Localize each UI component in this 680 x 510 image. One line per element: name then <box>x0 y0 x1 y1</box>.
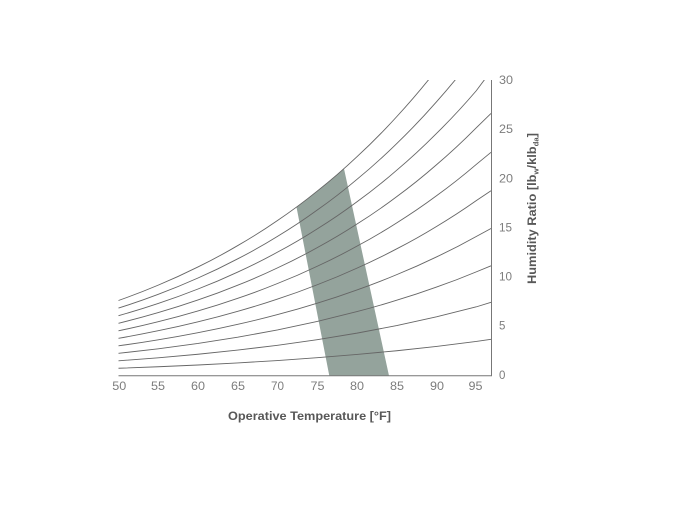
curve: 30% relative humidity <box>118 266 491 353</box>
x axis tick labels: 55 <box>151 381 165 393</box>
y axis tick labels: 20 <box>499 174 513 186</box>
y axis tick labels: 25 <box>499 124 513 136</box>
curve: 60% relative humidity <box>118 152 491 331</box>
y axis tick labels: 15 <box>499 222 512 234</box>
x axis tick labels: 85 <box>390 381 404 393</box>
curve: 80% relative humidity <box>118 71 491 316</box>
y axis tick labels <box>499 75 513 382</box>
curve: 90% relative humidity <box>118 80 456 308</box>
curve: 40% relative humidity <box>118 228 491 346</box>
x axis tick labels: 95 <box>468 381 482 393</box>
y axis title: da <box>534 137 540 146</box>
y axis tick labels: 0 <box>499 370 505 382</box>
x axis tick labels: 80 <box>350 381 364 393</box>
y axis title: ] <box>527 133 539 137</box>
curve: 50% relative humidity <box>118 191 491 338</box>
x axis tick labels: 60 <box>191 381 205 393</box>
x axis tick labels: 75 <box>310 381 324 393</box>
comfort zone shaded band <box>296 169 389 376</box>
chart axes <box>118 80 492 376</box>
y axis title: Humidity Ratio [lb <box>527 186 539 284</box>
y axis title: /klb <box>527 146 539 168</box>
y axis tick labels: 5 <box>499 320 505 332</box>
x axis tick labels: 90 <box>430 381 444 393</box>
y axis tick labels: 10 <box>499 272 512 284</box>
x axis tick labels: 70 <box>271 381 284 393</box>
relative humidity curves <box>118 53 491 368</box>
x axis tick labels <box>112 381 483 393</box>
x axis tick labels: 50 <box>112 381 126 393</box>
curve: 10% relative humidity <box>118 339 491 368</box>
curve: 20% relative humidity <box>118 302 491 361</box>
y axis title: w <box>534 168 540 176</box>
x axis tick labels: 65 <box>231 381 245 393</box>
psychrometric chart <box>112 76 538 422</box>
x axis title: Operative Temperature [°F] <box>228 411 391 423</box>
curve: 70% relative humidity <box>118 113 491 323</box>
y axis tick labels: 30 <box>499 75 513 87</box>
curve: 100% relative humidity <box>118 70 436 300</box>
